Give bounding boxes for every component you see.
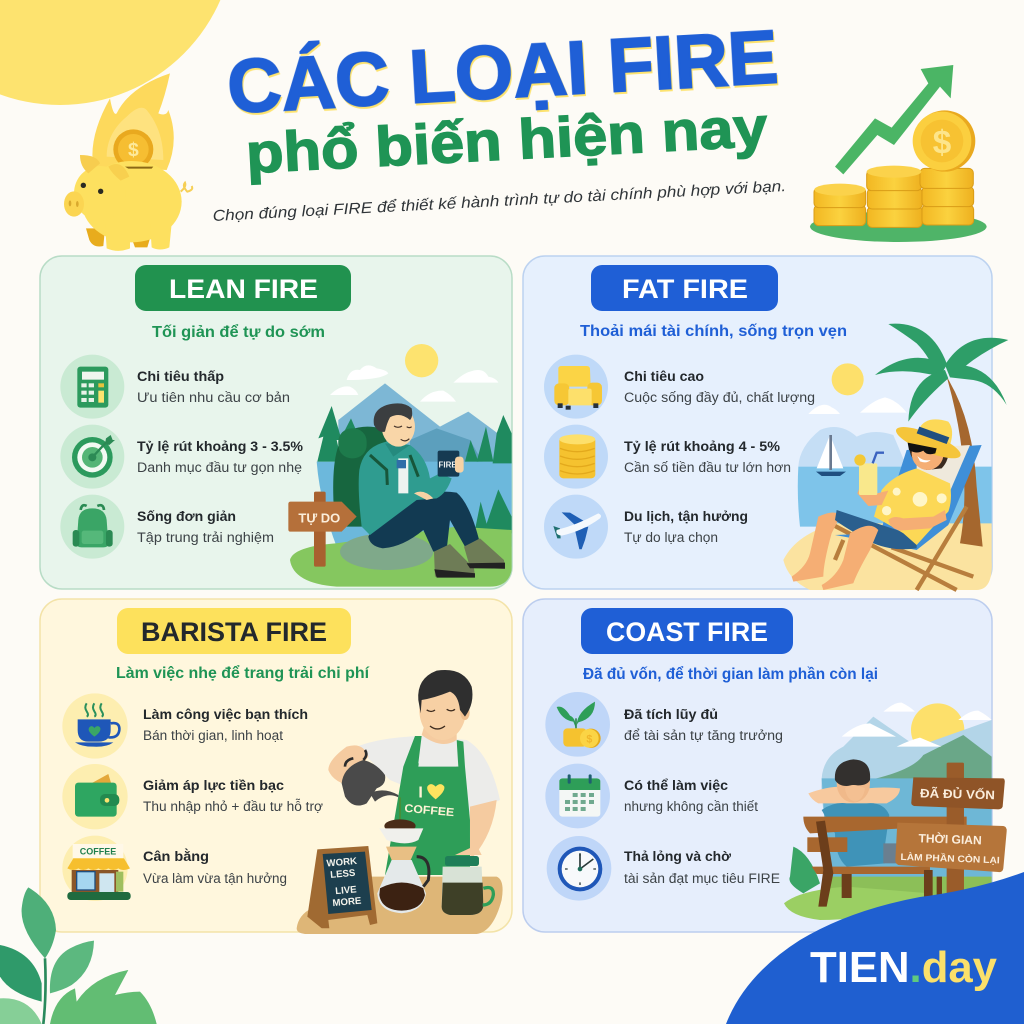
icon: coffee cup (62, 693, 128, 759)
item: chi tieu thap: Chi tiêu thấp (137, 368, 224, 384)
icon: coffee shop: COFFEE (80, 847, 116, 857)
decorative sun corner (0, 0, 235, 105)
subheading: lean: Tối giản để tự do sớm (152, 323, 325, 341)
item: ty le rut (544, 425, 791, 489)
subheading: coast: Đã đủ vốn, để thời gian làm phần còn lại (583, 665, 878, 683)
item: co the lam viec (545, 764, 758, 828)
item: ty le rut: Tỷ lệ rút khoảng 4 - 5% (624, 438, 781, 454)
icon: target (60, 425, 124, 489)
title line 1: CÁC LOẠI FIRE (225, 14, 780, 129)
item: co the lam viec: Có thể làm việc (624, 777, 728, 793)
item: cong viec: Bán thời gian, linh hoạt (143, 728, 283, 743)
icon: seedling and coins: $ (586, 733, 592, 745)
item: cong viec (62, 693, 308, 759)
decorative leaves (0, 887, 157, 1024)
illustration: barista pouring coffee: MORE (332, 896, 362, 909)
illustration: hiker resting: TỰ DO (298, 510, 340, 525)
icon: airplane (544, 495, 608, 559)
badge: coast fire: COAST FIRE (606, 617, 768, 647)
title line 2: phổ biến hiện nay (244, 95, 769, 185)
item: chi tieu thap: Ưu tiên nhu cầu cơ bản (137, 390, 290, 405)
icon: seedling and coins (545, 692, 610, 757)
icon: clock (547, 836, 611, 901)
badge: barista fire (117, 608, 351, 654)
illustration: barista pouring coffee: WORK (326, 856, 358, 870)
illustration: man on bench with signposts: LÀM PHẦN CÒN LẠI (900, 851, 1000, 865)
piggy bank with flame (64, 73, 192, 251)
item: giam ap luc: Giảm áp lực tiền bạc (143, 777, 284, 793)
item: can bang: Cân bằng (143, 847, 209, 864)
item: chi tieu thap (60, 355, 290, 419)
item: chi tieu cao: Chi tiêu cao (624, 368, 704, 384)
illustration: hiker resting (288, 344, 512, 587)
item: tha long: Thả lỏng và chờ (624, 848, 731, 864)
illustration: barista pouring coffee: I (418, 784, 423, 801)
item: tha long (547, 836, 780, 901)
item: giam ap luc (62, 764, 323, 829)
item: chi tieu cao (544, 355, 815, 419)
subtitle: Chọn đúng loại FIRE để thiết kế hành trình tự do tài chính phù hợp với bạn. (212, 178, 786, 225)
icon: backpack (60, 495, 124, 559)
item: cong viec: Làm công việc bạn thích (143, 706, 308, 722)
badge: coast fire (581, 608, 793, 654)
illustration: barista pouring coffee (297, 670, 503, 934)
item: ty le rut: Tỷ lệ rút khoảng 3 - 3.5% (137, 438, 304, 454)
item: da tich luy (545, 692, 783, 757)
illustration: beach lounger under palm (783, 324, 1008, 590)
panel: barista fire (40, 599, 512, 934)
badge: lean fire (135, 265, 351, 311)
coin stacks with growth arrow (810, 65, 987, 242)
icon: coffee shop (62, 836, 131, 901)
item: ty le rut: Danh mục đầu tư gọn nhẹ (137, 460, 302, 475)
icon: armchair (544, 355, 608, 419)
item: song don gian: Sống đơn giản (137, 508, 236, 524)
item: ty le rut (60, 425, 304, 489)
item: song don gian: Tập trung trải nghiệm (137, 530, 274, 545)
piggy bank with flame: $ (128, 140, 139, 161)
icon: coin stack (544, 425, 608, 489)
icon: calculator (60, 355, 124, 419)
item: tha long: tài sản đạt mục tiêu FIRE (624, 871, 780, 886)
subheading: barista: Làm việc nhẹ để trang trải chi phí (116, 664, 370, 682)
item: can bang (62, 836, 287, 901)
icon: calendar (545, 764, 610, 828)
badge: fat fire (591, 265, 778, 311)
illustration: barista pouring coffee: LESS (330, 868, 356, 881)
item: ty le rut: Cần số tiền đầu tư lớn hơn (624, 460, 791, 475)
illustration: man on bench with signposts: ĐÃ ĐỦ VỐN (920, 785, 995, 802)
subheading: fat: Thoải mái tài chính, sống trọn vẹn (580, 323, 847, 340)
icon: wallet (62, 764, 128, 829)
item: can bang: Vừa làm vừa tận hưởng (143, 871, 287, 886)
panel: coast fire (523, 599, 1007, 932)
item: song don gian (60, 495, 274, 559)
badge: lean fire: LEAN FIRE (169, 274, 318, 304)
item: da tich luy: để tài sản tự tăng trưởng (624, 728, 783, 743)
blue corner with logo (726, 872, 1024, 1024)
item: da tich luy: Đã tích lũy đủ (624, 706, 718, 722)
illustration: man on bench with signposts: THỜI GIAN (918, 830, 982, 847)
item: du lich: Tự do lựa chọn (624, 530, 718, 545)
illustration: barista pouring coffee: COFFEE (404, 803, 455, 819)
illustration: hiker resting: FIRE (439, 460, 457, 469)
item: du lich (544, 495, 748, 559)
panel: fat fire (523, 256, 1008, 590)
item: du lich: Du lịch, tận hưởng (624, 508, 748, 524)
logo: TIEN.day: TIEN.day (810, 943, 998, 992)
badge: barista fire: BARISTA FIRE (141, 617, 327, 647)
badge: fat fire: FAT FIRE (622, 274, 748, 304)
illustration: barista pouring coffee: LIVE (335, 884, 358, 897)
item: giam ap luc: Thu nhập nhỏ + đầu tư hỗ trợ (143, 799, 323, 814)
item: co the lam viec: nhưng không cần thiết (624, 799, 758, 814)
illustration: man on bench with signposts (784, 703, 1007, 920)
item: chi tieu cao: Cuộc sống đầy đủ, chất lượng (624, 390, 815, 405)
coin stacks with growth arrow: $ (933, 124, 952, 161)
panel: lean fire (40, 256, 512, 589)
